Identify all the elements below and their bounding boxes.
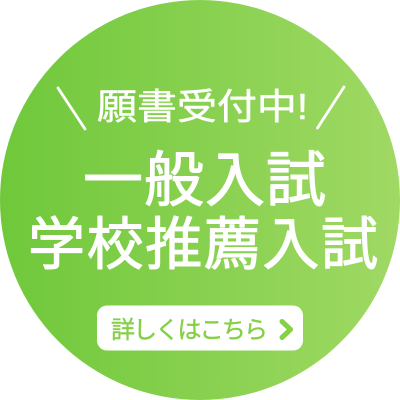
button label: 詳しくはこちら — [111, 317, 268, 344]
left slash decoration — [58, 88, 85, 129]
heading: applications open: 願書受付中! — [97, 86, 308, 127]
right slash decoration — [318, 87, 344, 128]
button background — [97, 306, 303, 350]
button: details — [97, 306, 303, 350]
title line 1: 一般入試 — [83, 147, 326, 214]
title line 2: 学校推薦入試 — [28, 213, 378, 277]
icon: chevron arrow — [282, 322, 290, 338]
